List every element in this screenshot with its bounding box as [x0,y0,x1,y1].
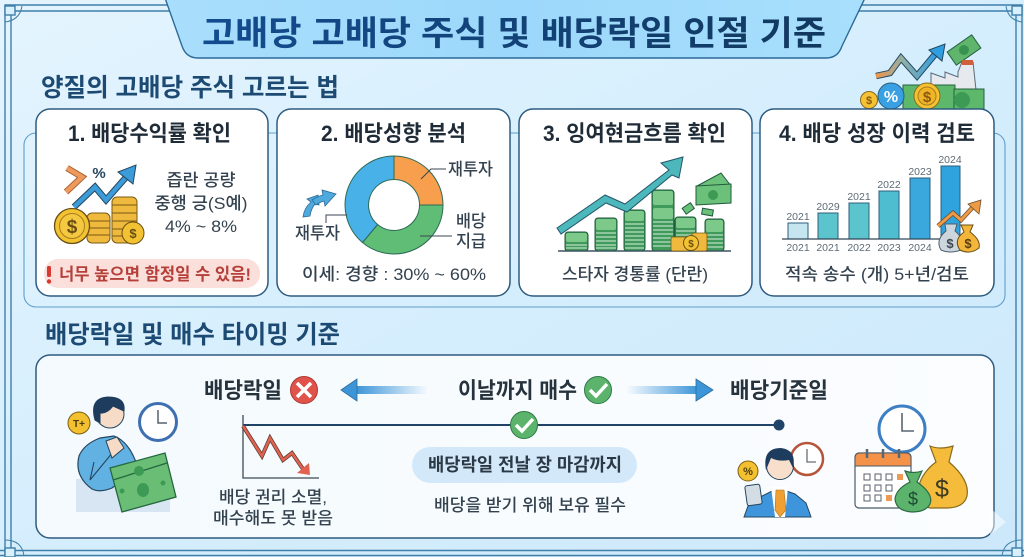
panel: card 4 dividend growth [760,109,994,296]
callout: deadline pill: 배당락일 전날 장 마감까지 [428,455,622,475]
text: holding required: 배당을 받기 위해 보유 필수 [434,496,626,515]
panel: card 1 dividend yield [36,109,268,296]
label: reinvest right: 재투자 [448,160,493,179]
icon: top right finance cluster: $ [923,89,932,106]
text: yield range: 4% ~ 8% [165,217,237,236]
chart: money stacks with arrow: $ [688,239,694,250]
icon: coins and rising arrow: % [92,165,106,182]
icon: money bags and arrow [938,200,981,252]
icon: coins and rising arrow [54,165,144,244]
chart: growth bars: 2021 [847,191,871,203]
chart: growth bars: 2022 [847,242,871,254]
timeline [243,412,784,438]
callout: deadline pill [412,447,637,483]
chart: growth bars: 2022 [877,179,901,191]
icon: calendar, clock and money bags: $ [935,475,949,503]
text: rights lost: 매수해도 못 받음 [213,509,333,528]
title: 고배당 고배당 주식 및 배당락일 인절 기준 [202,15,826,53]
icon: calendar, clock and money bags [855,406,967,512]
icon: coins and rising arrow: $ [67,217,78,238]
heading: card 4: 4. 배당 성장 이력 검토 [779,121,975,146]
chart: growth bars: 2021 [786,242,810,254]
decorative chevron [990,508,1006,535]
chart: growth bars: 2023 [908,166,932,178]
icon: money bags and arrow: $ [964,236,972,251]
label: leaders [326,169,452,236]
text: rights lost: 배당 권리 소멸, [219,488,327,507]
icon: top right finance cluster: % [884,89,898,106]
icon: money bags and arrow: $ [946,236,954,251]
icon: check [584,376,612,404]
chart: growth bars: 2024 [908,242,932,254]
chart: money stacks with arrow [557,157,731,251]
text: yield range: 중행 긍(S예) [154,194,248,213]
icon: investor with phone: % [743,466,753,478]
chart: payout donut [345,156,443,254]
text: caption: 스타자 경통률 (단란) [562,265,708,284]
heading: section one: 양질의 고배당 주식 고르는 법 [41,74,339,102]
chart: growth bars: 2024 [938,154,962,166]
label: ex-dividend date: 배당락일 [204,378,282,403]
icon: cross [290,376,318,404]
chart: growth bars [782,154,981,254]
chart: growth bars: 2023 [877,242,901,254]
chart: growth bars: 2021 [816,242,840,254]
chart: falling price [243,415,319,478]
callout: warning: 너무 높으면 함정일 수 있음! [59,265,251,284]
icon: top right finance cluster: $ [866,95,872,107]
label: buy until today: 이날까지 매수 [458,378,577,403]
label: reinvest left: 재투자 [295,224,340,243]
panel: backing for cards [24,133,1005,307]
icon: investor with phone [738,443,823,517]
panel: ex-dividend timeline [36,355,994,538]
icon: coins and rising arrow: $ [129,226,137,241]
text: yield range: 즙란 공량 [166,171,236,190]
chart: growth bars: 2029 [816,201,840,213]
arrow: left [341,379,428,401]
icon: thinking investor: T+ [73,419,85,430]
panel: card 3 free cash flow [519,109,752,296]
arrow: right [626,379,713,401]
icon: thinking investor [68,397,176,512]
label: dividend paid: 배당 [456,212,486,231]
title banner [165,0,865,58]
label: dividend paid [456,212,486,251]
money stack tops [566,191,723,242]
heading: card 2: 2. 배당성향 분석 [321,121,466,146]
text: payout range: 이세: 경향 : 30% ~ 60% [302,265,486,284]
panel: card 2 payout ratio [277,109,510,296]
text: yield range [154,171,248,236]
icon: reinvest arrow [303,190,336,217]
heading: section two: 배당락일 및 매수 타이밍 기준 [45,321,340,349]
text: caption: 적속 송수 (개) 5+년/검토 [785,265,969,284]
text: rights lost [213,488,333,528]
label: record date: 배당기준일 [730,378,828,403]
callout: warning [44,259,260,288]
icon: calendar, clock and money bags: $ [908,489,918,509]
chart: growth bars: 2021 [786,211,810,223]
icon: top right finance cluster [860,35,984,110]
label: dividend paid: 지급 [456,232,486,251]
heading: card 3: 3. 잉여현금흐름 확인 [543,121,726,146]
heading: card 1: 1. 배당수익률 확인 [68,121,231,146]
